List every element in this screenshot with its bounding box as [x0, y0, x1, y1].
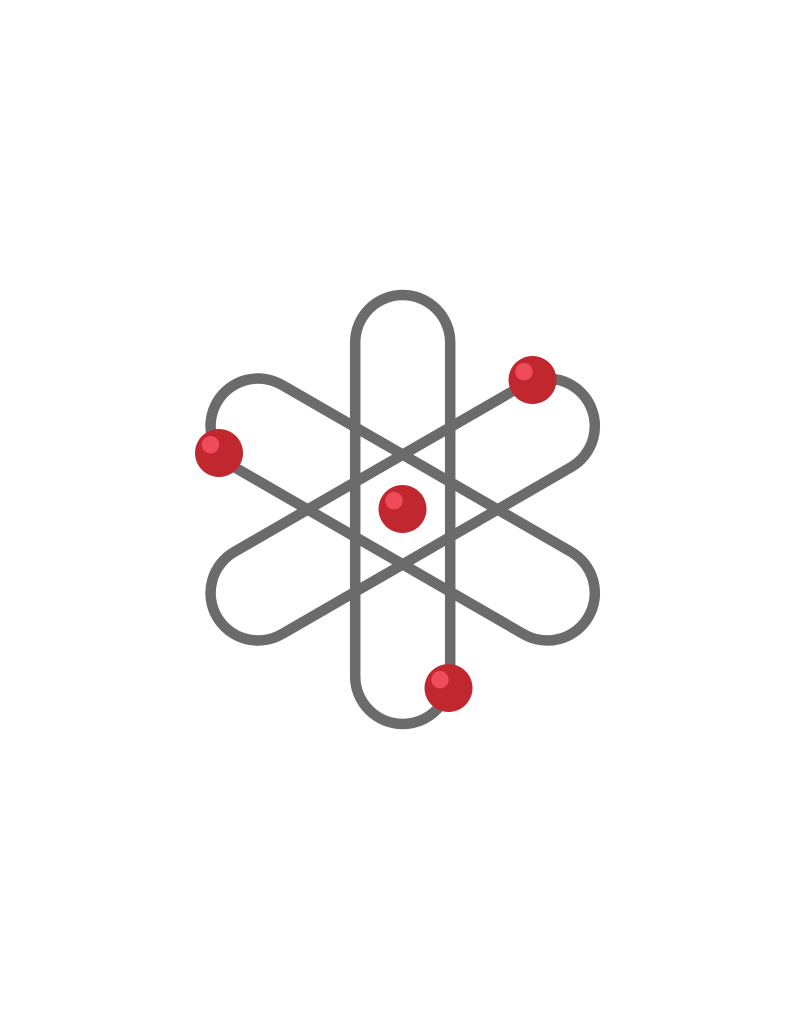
- electron: upper right: [508, 356, 556, 404]
- orbit: vertical: [355, 295, 450, 724]
- electron: left: [195, 429, 243, 477]
- orbit: rotated 60 degrees: [193, 361, 612, 658]
- orbits: [193, 295, 612, 724]
- orbit: rotated -60 degrees: [193, 361, 612, 658]
- electron: bottom: [424, 664, 472, 712]
- nucleus: [378, 485, 426, 533]
